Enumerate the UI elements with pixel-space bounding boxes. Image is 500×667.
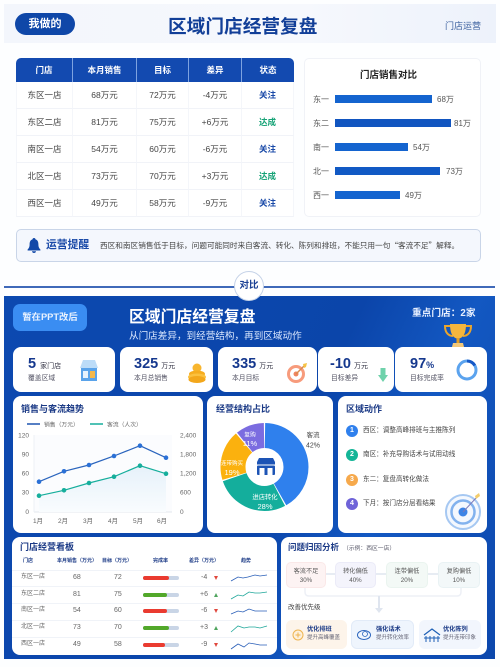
donut chart: 28%: [257, 502, 273, 511]
chart heading: 门店销售对比: [360, 70, 417, 81]
line chart: 销售（万元）: [44, 420, 79, 428]
panel heading: 门店经营看板: [20, 542, 74, 552]
line chart: [18, 420, 197, 525]
badge: 对比: [234, 271, 264, 301]
table: store results: 73万元: [91, 171, 118, 181]
line chart: 2,400: [180, 432, 197, 440]
row: 西区一店: 49: [73, 641, 81, 648]
priority label: 改善优先级: [288, 604, 320, 611]
line chart: 5月: [133, 517, 143, 525]
table: store results: 70万元: [149, 171, 176, 181]
table: store results: 北区一店: [27, 171, 62, 181]
panel heading: 问题归因分析 （示例：西区一店）: [288, 542, 395, 552]
action 1: [346, 425, 358, 437]
cause box: 客流不足: 客流不足: [294, 568, 318, 574]
icon: store: [257, 458, 275, 475]
cause box: 复购偏低: 10%: [453, 577, 465, 584]
line chart: 0: [25, 509, 29, 516]
line chart: 2月: [58, 517, 68, 525]
KPI card: monthly target: [218, 347, 317, 392]
priority: 强化话术: 提升转化效率: [376, 635, 409, 641]
cause box: 连带偏低: 20%: [401, 577, 413, 584]
action 4 text: 下月：按门店分层看结果: [363, 500, 436, 507]
label: 目标差异: [331, 375, 358, 382]
dashboard header row: 完成率: [153, 558, 168, 564]
priority: 强化话术: [351, 620, 414, 649]
table: store results: -6万元: [203, 144, 227, 154]
cause box: 连带偏低: 连带偏低: [395, 568, 419, 574]
icon: down arrow: [378, 368, 388, 382]
value: 97%: [410, 356, 434, 372]
panel: regional actions: [338, 396, 487, 533]
KPI card: target gap: [318, 347, 394, 392]
row: 西区一店: -9: [201, 641, 207, 648]
table: store results: 49万元: [91, 198, 118, 208]
line chart: 30: [22, 490, 29, 496]
donut chart: 客流: [306, 430, 320, 439]
key stores label: 重点门店：2家: [412, 308, 476, 319]
panel: root cause analysis: [281, 537, 487, 655]
donut chart: 42%: [306, 442, 320, 450]
donut chart: 11%: [243, 439, 258, 448]
cause box: 转化偏低: 40%: [349, 577, 362, 584]
table: store results: 68万元: [91, 90, 118, 100]
category label: 门店运营: [445, 21, 481, 31]
bar chart: 81万: [454, 119, 471, 128]
row: 东区二店: +6: [200, 591, 208, 598]
icon: trophy: [444, 324, 472, 347]
action 4: [346, 498, 358, 510]
KPI card: completion: [395, 347, 487, 392]
bar chart: 54万: [413, 143, 430, 152]
table: store results: [16, 58, 294, 217]
table: store results: 东区一店: [27, 90, 62, 100]
header band: [4, 4, 496, 43]
bar chart: 西一: [313, 191, 329, 200]
icon: target: [445, 493, 481, 530]
row: 北区一店: 73: [73, 624, 81, 631]
line chart: 1,200: [180, 470, 197, 478]
bar chart: 东一: [313, 94, 329, 104]
label: 目标完成率: [410, 375, 444, 382]
action 1: 1: [350, 427, 354, 434]
action 2: 2: [350, 451, 354, 458]
row: 西区一店: 58: [114, 641, 122, 648]
lower subtitle: 从门店差异，到经营结构，再到区域动作: [129, 331, 302, 342]
line chart: 客流（人次）: [107, 420, 142, 428]
bar chart: 北一: [313, 167, 329, 176]
dashboard header row: 门店: [23, 558, 33, 564]
action 3: [346, 474, 358, 486]
action 2 text: 南区：补充导购话术与试用动线: [363, 451, 455, 458]
donut chart: 连带购买: [221, 459, 243, 467]
donut chart: [220, 423, 320, 511]
cause box: 转化偏低: 转化偏低: [343, 568, 368, 574]
value: 335 万元: [232, 356, 273, 372]
cause box: 客流不足: 30%: [300, 577, 312, 584]
dashboard header row: 本月销售（万元）: [57, 558, 97, 564]
label: 本月总销售: [134, 375, 168, 382]
icon: display shelf: [424, 628, 440, 642]
table: store results: 西区一店: [27, 198, 62, 208]
panel heading: 区域动作: [346, 404, 382, 414]
priority: 优化排班: [286, 620, 347, 649]
row: 西区一店: [12, 637, 277, 654]
icon: progress ring: [456, 360, 478, 380]
donut chart: 复购: [244, 430, 256, 438]
cause box: 复购偏低: 复购偏低: [447, 568, 471, 574]
callout: operations reminder: [16, 229, 481, 262]
row: 东区一店: -4: [201, 574, 207, 581]
action 2: [346, 449, 358, 461]
table: store results: 状态: [259, 65, 276, 75]
row: 北区一店: 北区一店: [21, 624, 45, 630]
value: -10 万元: [330, 356, 368, 372]
panel: business structure: [207, 396, 333, 533]
KPI card: stores: [13, 347, 115, 392]
row: 北区一店: +3: [200, 624, 208, 631]
table: store results: 关注: [259, 144, 276, 154]
row: 北区一店: [12, 620, 277, 637]
table: store results: 关注: [259, 90, 276, 100]
line chart: 90: [22, 452, 29, 458]
icon: plus circle: [292, 630, 304, 640]
table: store results: 门店: [35, 65, 52, 75]
reminder heading: 运营提醒: [46, 239, 89, 251]
table: store results: 本月销售: [87, 65, 122, 75]
row: 东区二店: 东区二店: [21, 591, 45, 597]
donut chart: 进店转化: [252, 492, 278, 501]
row: 东区二店: 81: [73, 591, 81, 598]
divider line: [4, 286, 495, 288]
value: 325 万元: [134, 356, 175, 372]
cause box: 复购偏低: [438, 562, 480, 588]
label: 覆盖区域: [28, 375, 55, 382]
bar chart: 49万: [405, 191, 422, 200]
priority: 优化陈列: [419, 620, 481, 649]
panel: store dashboard: [12, 537, 277, 655]
table: store results: 75万元: [149, 117, 176, 127]
line chart: 1,800: [180, 452, 197, 458]
bar chart: 东二: [313, 118, 329, 128]
table: store results: 达成: [259, 171, 276, 181]
action 1 text: 西区：调整高峰排班与主推陈列: [363, 427, 455, 434]
line chart: 3月: [83, 517, 93, 525]
row: 南区一店: -6: [201, 607, 207, 614]
dashboard header row: 目标（万元）: [102, 558, 132, 564]
tag: 我做的: 我做的: [28, 18, 62, 30]
reminder text: 西区和南区销售低于目标，问题可能同时来自客流、转化、陈列和排班，不能只用一句“客流不足”解释。: [100, 240, 459, 251]
priority: 优化排班: 优化排班: [307, 626, 332, 633]
icon: bell: [28, 238, 40, 253]
cause box: 转化偏低: [335, 562, 376, 588]
icon: coins: [188, 364, 206, 383]
cause box: 连带偏低: [386, 562, 428, 588]
table: store results: 差异: [206, 65, 224, 75]
table: store results: -4万元: [203, 90, 227, 100]
row: 南区一店: 54: [73, 607, 81, 614]
action 4: 4: [350, 500, 354, 507]
donut chart: 19%: [224, 468, 240, 477]
connector lines: [304, 573, 462, 613]
table: store results: 东区二店: [27, 117, 62, 127]
icon: store: [80, 360, 98, 381]
action 3: 3: [350, 476, 354, 483]
line chart: 1月: [33, 517, 43, 525]
table: store results: 目标: [154, 65, 171, 75]
bar chart: 南一: [313, 142, 329, 152]
KPI card: total sales: [120, 347, 213, 392]
table: store results: 54万元: [91, 144, 118, 154]
table: store results: +6万元: [202, 117, 228, 127]
line chart: 4月: [108, 517, 118, 525]
bar chart: 68万: [437, 95, 454, 104]
row: 东区一店: 68: [73, 574, 81, 581]
row: 东区一店: 东区一店: [21, 574, 45, 580]
priority: 强化话术: 强化话术: [376, 626, 401, 633]
table: store results: 关注: [259, 198, 276, 208]
row: 南区一店: 南区一店: [21, 607, 45, 613]
bar chart: [313, 94, 471, 200]
line chart: 600: [180, 490, 191, 496]
row: 西区一店: 西区一店: [21, 641, 45, 647]
tag: 我做的: [15, 13, 75, 35]
blue section background: [4, 296, 495, 659]
row: 北区一店: 70: [114, 624, 122, 631]
table: store results: 60万元: [149, 144, 176, 154]
dashboard header row: 差异（万元）: [189, 558, 219, 564]
table: store results: 南区一店: [27, 144, 62, 154]
panel heading: 销售与客流趋势: [21, 404, 84, 414]
badge: 对比: 对比: [239, 280, 258, 291]
panel heading: 经营结构占比: [216, 404, 270, 414]
value: 5 家门店: [28, 356, 61, 372]
dashboard header row: [23, 557, 251, 564]
table: store results: 58万元: [149, 198, 176, 208]
line chart: 0: [180, 509, 184, 516]
priority: 优化陈列: 优化陈列: [443, 626, 468, 633]
tag: 暂在PPT改后: 暂在PPT改后: [22, 312, 78, 322]
bar chart: 73万: [446, 167, 463, 176]
main title: 区域门店经营复盘: [168, 16, 318, 37]
table: store results: 达成: [259, 117, 276, 127]
row: 南区一店: [12, 603, 277, 620]
priority: 优化陈列: 提升连带印象: [443, 635, 476, 641]
table: store results: +3万元: [202, 171, 228, 181]
line chart: 60: [22, 470, 29, 478]
row: 东区一店: 72: [114, 574, 122, 581]
icon: target: [287, 363, 307, 383]
line chart: 6月: [157, 517, 167, 525]
table: store results: 72万元: [149, 90, 176, 100]
lower title: 区域门店经营复盘: [129, 309, 255, 326]
row: 东区二店: 75: [114, 591, 122, 598]
action 3 text: 东二：复盘高转化做法: [363, 476, 429, 483]
cause box: 客流不足: [286, 562, 326, 588]
panel: sales and traffic trend: [13, 396, 203, 533]
panel: store sales comparison: [304, 58, 481, 217]
priority: 优化排班: 提升高峰覆盖: [307, 635, 340, 641]
tag: 暂在PPT改后: [13, 304, 87, 331]
table: store results: 81万元: [91, 117, 118, 127]
table: store results: -9万元: [203, 198, 227, 208]
label: 本月目标: [232, 375, 259, 382]
row: 南区一店: 60: [114, 607, 122, 614]
line chart: 120: [18, 432, 29, 440]
dashboard header row: 趋势: [241, 558, 251, 564]
row: 东区一店: [12, 570, 277, 586]
icon: speech bubbles: [357, 630, 371, 640]
row: 东区二店: [12, 586, 277, 603]
